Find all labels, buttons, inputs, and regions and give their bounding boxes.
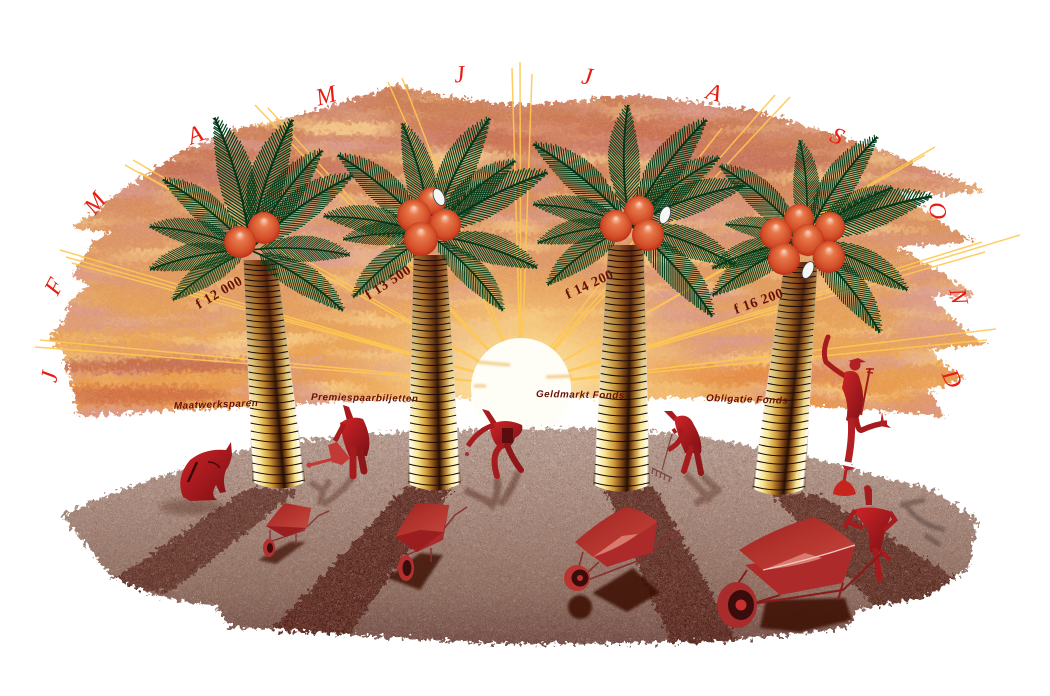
statue base (833, 480, 856, 496)
value 4: f 16 200 (732, 286, 786, 318)
coin 4 (800, 260, 816, 280)
value 3: f 14 200 (563, 267, 616, 303)
trunk 2 (404, 255, 461, 490)
month letters: A (182, 121, 207, 151)
month letters: J (580, 63, 595, 91)
month letters (36, 61, 973, 392)
fund labels: Geldmarkt Fonds (536, 389, 625, 402)
coconuts 1 (224, 212, 280, 258)
object shadows (160, 472, 945, 632)
figure: Mercury statue (824, 337, 891, 496)
palm 4: Obligatie Fonds (703, 124, 936, 495)
coconuts 2 (397, 187, 461, 256)
value 2: f 13 500 (363, 263, 414, 303)
wheelbarrow 3 (564, 507, 680, 591)
month letters: N (943, 285, 973, 309)
sun (471, 338, 572, 438)
piggy bank (180, 442, 232, 501)
month letters: A (701, 78, 725, 108)
month letters: M (78, 186, 113, 220)
palm 2: Premiespaarbiljetten (322, 108, 553, 490)
fund labels (174, 389, 789, 412)
rake (652, 434, 672, 482)
trunk 4 (752, 262, 828, 495)
palm 1: Maatwerksparen (147, 112, 360, 488)
figure: watering (306, 405, 369, 476)
month letters: J (453, 61, 467, 88)
month letters: F (39, 274, 70, 300)
watering can (306, 442, 350, 468)
coin 2 (431, 187, 447, 207)
coconuts 3 (600, 196, 664, 251)
fund labels: Obligatie Fonds (706, 393, 789, 407)
value 1: f 12 000 (194, 274, 246, 312)
trunk 3 (593, 245, 654, 492)
fronds 2 (322, 108, 553, 317)
ground panel (40, 420, 1000, 650)
fronds 4 (703, 124, 936, 339)
sky panel (48, 82, 988, 420)
sun rays (35, 62, 1020, 385)
trunk 1 (234, 260, 306, 488)
month letters: S (826, 122, 848, 151)
fund labels: Maatwerksparen (174, 398, 259, 412)
figure: raking (652, 411, 701, 482)
month letters: M (312, 81, 341, 112)
fronds 1 (147, 112, 360, 319)
wheelbarrow 2 (395, 503, 467, 581)
month letters: D (935, 365, 967, 392)
coconuts 4 (760, 204, 845, 275)
month letters: O (923, 200, 951, 222)
fronds 3 (526, 105, 749, 324)
coin 3 (657, 205, 673, 225)
wheelbarrow 1 (263, 503, 329, 557)
figure: sowing (465, 409, 522, 476)
fund labels: Premiespaarbiljetten (311, 392, 419, 405)
figure: wheelbarrow man (844, 485, 895, 582)
palm 3: Geldmarkt Fonds (526, 105, 749, 492)
wheelbarrow 4 (717, 517, 882, 628)
month letters: J (36, 368, 64, 384)
trunk shadows (100, 487, 968, 645)
